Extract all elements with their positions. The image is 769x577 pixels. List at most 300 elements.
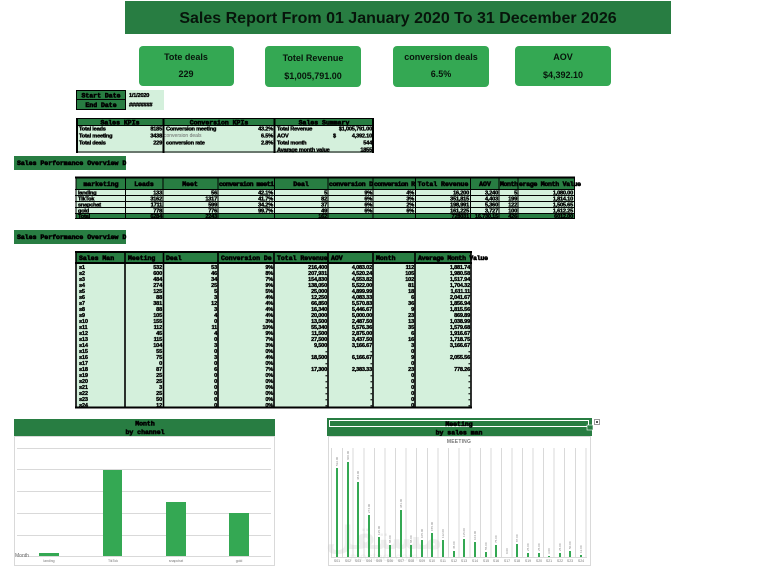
KPI summary table: conversion deals [164,133,202,139]
meeting column: 274 [153,283,163,289]
KPI summary table: Conversion KPIs [190,120,248,126]
sales man names [79,265,89,409]
KPI summary table: AOV [277,134,289,140]
marketing channel table: 3% [406,196,414,202]
revenue column: 20,000 [311,313,327,319]
revenue column: 16,340 [311,307,327,313]
KPI summary table: 1855 [360,148,372,154]
revenue column: 25,000 [311,289,327,295]
conversion column: 9% [265,331,273,337]
AOV column: 4,083.33 [352,295,372,301]
revenue column: 17,300 [311,367,327,373]
month column: 9 [411,355,414,361]
marketing channel table: 6% [406,208,414,214]
meeting column: 532 [153,265,162,271]
KPI card: Tote deals: Tote deals [164,52,208,62]
marketing channel table: 1,505.65 [553,202,573,208]
meeting column: 104 [153,343,163,349]
meeting data labels: 25.00 [537,543,541,551]
month column: 102 [405,277,414,283]
sales man names: s21 [79,385,88,391]
revenue column: - [325,361,327,367]
marketing channel table: 1711 [151,202,162,208]
marketing channel table: 122 [508,202,517,208]
date filter block: Start Date [81,92,121,100]
sales man names: s20 [79,379,88,385]
meeting data labels: 104.00 [473,530,477,540]
KPI summary table: 8185 [150,126,162,132]
title banner: Sales Report From 01 January 2020 To 31 December 2026 [179,10,617,27]
conversion column: 4% [265,295,273,301]
KPI summary table: $ [333,134,337,140]
section heading: overview 1: Sales Performance Overview D [17,160,126,167]
average month value column: 1,916.67 [450,331,470,337]
sales man names: s7 [79,301,85,307]
conversion column: 3% [265,343,273,349]
marketing channel table: 2% [406,202,414,208]
marketing channel table: 16,200 [453,190,469,196]
AOV column: - [370,397,372,403]
month column: 23 [408,367,414,373]
meeting data labels: 115.00 [462,528,466,537]
revenue column: 18,500 [311,355,327,361]
sales man names: s18 [79,367,88,373]
month chart header: Month [135,420,155,428]
meeting axis labels: S11 [440,559,446,563]
average month value column: - [468,361,470,367]
deal column: 3 [214,343,217,349]
marketing channel table: Leads [134,181,154,188]
average month value column: 3,166.67 [450,343,470,349]
month column: 18 [408,289,414,295]
meeting axis labels: S04 [366,559,372,563]
deal column: 4 [214,313,218,319]
month column: 9 [411,307,414,313]
deal column: 3 [214,307,217,313]
marketing channel table: 34.2% [258,202,273,208]
meeting axis labels: S01 [334,559,340,563]
marketing channel table: landing [78,190,97,196]
KPI card: Tote deals: 229 [178,69,194,79]
deal column: 0 [214,391,217,397]
AOV column [352,265,373,409]
meeting data labels: 381.00 [399,498,403,508]
average month value column: - [468,391,470,397]
month column: 0 [411,403,414,409]
marketing channel table: 351,815 [450,196,469,202]
meeting column: 600 [153,271,162,277]
marketing channel table: Total Revenue [418,181,468,188]
AOV column: 3,437.50 [352,337,372,343]
average month value column: - [468,349,470,355]
deal column: 0 [214,337,217,343]
bar chart: month by channel: TikTok [108,559,118,563]
KPI summary table: Total leads [79,126,106,132]
AOV column: 5,000.00 [352,313,372,319]
KPI card: Total Revenue: $1,005,791.00 [284,71,342,81]
KPI summary table: Total deals [79,140,106,146]
meeting data labels [335,450,583,554]
sales man table: Conversion De [221,255,272,262]
month column: 36 [408,301,414,307]
KPI summary table: 43.2% [258,126,273,132]
deal column: 0 [214,319,217,325]
meeting data labels: 88.00 [409,535,413,543]
AOV column: 5,522.00 [352,283,372,289]
meeting data labels: 45.00 [452,541,456,549]
meeting column: 25 [156,373,162,379]
meeting chart header: Meeting [445,421,473,428]
marketing channel table: 6% [364,202,372,208]
average month value column: - [468,373,470,379]
marketing channel table: 3162 [150,196,162,202]
marketing channel table: conversion D [329,181,373,188]
meeting axis labels: S19 [525,559,531,563]
month column: 0 [411,373,414,379]
meeting axis labels: S02 [345,559,351,563]
meeting column: 45 [156,331,162,337]
month column: 0 [411,397,414,403]
AOV column: 2,875.00 [352,331,372,337]
KPI summary table: 2.8% [261,140,273,146]
meeting axis labels: S13 [461,559,467,563]
revenue column: 138,050 [308,283,327,289]
month chart header [14,419,275,436]
KPI summary table: Sales Summary [299,120,349,126]
meeting data labels: 0.00 [505,548,509,554]
bar chart: month by channel: landing [43,559,55,563]
deal column: 46 [211,271,217,277]
sales man table: Month [376,255,396,262]
sales man names: s8 [79,307,85,313]
sales man names: s9 [79,313,85,319]
marketing channel table: 776 [208,208,217,214]
AOV column: 4,553.82 [352,277,372,283]
average month value column: 2,055.56 [450,355,470,361]
marketing channel table: 9% [364,190,372,196]
average month value column: 1,718.75 [450,337,470,343]
average month value column: 1,038.99 [450,319,470,325]
revenue column: 207,931 [308,271,327,277]
conversion column: 4% [265,307,273,313]
sales man names: s5 [79,289,85,295]
meeting axis labels: S06 [387,559,393,563]
meeting column [153,265,163,409]
marketing channel table: 49 [321,208,327,214]
KPI summary table: Avarage month value [277,148,330,154]
meeting column: 88 [156,307,162,313]
meeting column: 115 [154,337,162,343]
sales man table: Average Month Value [418,255,488,262]
meeting column: 50 [156,397,162,403]
revenue column: - [325,373,327,379]
marketing channel table: 599 [208,202,217,208]
meeting data labels: 87.00 [515,534,519,542]
month column: 81 [408,283,414,289]
AOV column: 6,166.67 [352,355,372,361]
AOV column: - [370,403,372,409]
sales man names: s11 [79,325,88,331]
conversion column: 5% [265,289,273,295]
conversion column: 0% [265,385,273,391]
AOV column: 4,520.24 [352,271,373,277]
sales man names: s12 [79,331,88,337]
deal column: 3 [214,355,217,361]
meeting data labels: 25.00 [558,543,562,551]
deal column: 0 [214,349,217,355]
deal column: 6 [214,367,217,373]
meeting column: 12 [156,403,162,409]
sales man table [75,251,488,409]
revenue column: - [325,379,327,385]
sales man table: Meeting [128,255,155,262]
conversion column: 10% [262,325,273,331]
section heading: overview 2 [14,230,126,244]
month column: 13 [408,319,414,325]
conversion column: 7% [265,277,273,283]
meeting axis labels: S20 [536,559,542,563]
deal column: 0 [214,361,217,367]
marketing channel table: 778 [153,208,162,214]
marketing channel table: TikTok [78,196,95,202]
marketing channel table: 5 [514,190,517,196]
month column: 0 [411,361,414,367]
average month value column: - [468,385,470,391]
marketing channel table: 6% [364,196,372,202]
bar chart: meeting by sales man: MEETING [447,439,471,445]
revenue column: 216,400 [308,265,327,271]
average month value column: 2,041.67 [450,295,470,301]
meeting column: 112 [154,325,162,331]
marketing channel table: snapchat [78,202,101,208]
meeting column: 155 [153,319,162,325]
selection handle icon [594,420,600,424]
meeting column: 88 [156,295,162,301]
meeting axis labels: S05 [376,559,382,563]
meeting column: 105 [153,313,162,319]
marketing channel table: 162 [318,214,327,220]
revenue column: 13,500 [311,319,327,325]
sales man names: s14 [79,343,89,349]
average month value column: 1,704.32 [450,283,470,289]
AOV column: 2,487.50 [352,319,372,325]
meeting data labels: 3.00 [547,548,551,554]
conversion column: 9% [265,265,273,271]
meeting data labels: 155.00 [430,521,434,531]
sales man names: s1 [79,265,85,271]
revenue column: - [325,403,327,409]
conversion column: 3% [265,319,273,325]
meeting axis labels: S18 [514,559,520,563]
marketing channel table: 41.7% [258,196,273,202]
meeting data labels: 600.00 [346,450,350,460]
meeting data labels: 25.00 [526,543,530,551]
AOV column: - [370,379,372,385]
average month value column: 1,856.94 [450,301,471,307]
revenue column: 9,500 [314,343,327,349]
deal column: 0 [214,379,217,385]
month column: 0 [411,385,414,391]
conversion column: 4% [265,313,273,319]
marketing channel table: 100 [508,208,517,214]
conversion column [262,265,273,409]
meeting data labels: 75.00 [494,535,498,543]
meeting column: 55 [156,349,162,355]
conversion column: 7% [265,367,273,373]
meeting column: 381 [153,301,162,307]
conversion column: 0% [265,391,273,397]
KPI card: AOV: $4,392.10 [543,70,583,80]
KPI summary table [76,118,374,154]
bar chart: month by channel: gold [236,559,242,563]
marketing channel table: 1,612.25 [553,208,573,214]
revenue column: - [325,349,327,355]
KPI card: conversion deals [393,46,489,87]
average month value column: 778.26 [454,367,470,373]
marketing channel table: 1,814.10 [553,196,573,202]
month column: 35 [408,325,414,331]
meeting data labels: 112.00 [441,529,445,538]
revenue column: - [325,397,327,403]
month column: 16 [408,337,414,343]
meeting bars [336,462,582,557]
revenue column: 27,500 [311,337,327,343]
meeting axis labels: S22 [557,559,563,563]
KPI summary table: conversion rate [166,140,205,146]
meeting axis labels: S09 [419,559,425,563]
conversion column: 8% [265,271,273,277]
marketing channel table: erage Month Value [519,181,581,188]
KPI summary table: 229 [153,140,162,146]
month column: 105 [405,271,414,277]
revenue column: 154,830 [308,277,327,283]
marketing channel table: 1,080.00 [553,190,573,196]
meeting chart header: by sales man [436,430,483,436]
marketing channel table: 5 [324,190,327,196]
revenue column: 66,850 [311,301,327,307]
date filter block: ######## [129,102,153,108]
bar chart: meeting by sales man [325,436,590,566]
month column: 0 [411,391,414,397]
AOV column: 5,446.67 [352,307,372,313]
KPI card: AOV: AOV [553,52,573,62]
sales man names: s22 [79,391,88,397]
deal column [211,265,218,409]
marketing channel table: 56 [211,190,217,196]
marketing channel table: conversion meeti [219,181,274,188]
watermark: مستقل [325,519,443,557]
average month value column: - [468,379,470,385]
KPI summary table: Total month [277,140,307,146]
AOV column: - [370,373,372,379]
meeting data labels: 274.00 [367,503,371,513]
deal column: 11 [211,325,217,331]
sales man names: s4 [79,283,86,289]
average month value column: 1,611.11 [450,289,470,295]
KPI summary table: 3438 [150,134,162,140]
meeting axis labels: S12 [451,559,457,563]
deal column: 5 [214,289,217,295]
marketing channel table: Deal [293,181,309,188]
marketing channel table: Month [500,181,518,188]
KPI card: conversion deals: conversion deals [404,52,478,62]
average month value column: 869.89 [454,313,470,319]
AOV column: 4,899.99 [352,289,372,295]
deal column: 12 [211,301,217,307]
marketing channel table: 2243 [205,214,217,220]
average month value column: - [468,403,470,409]
marketing channel table: 1317 [205,196,217,202]
KPI card: conversion deals: 6.5% [431,69,451,79]
AOV column: 5,570.83 [352,301,372,307]
marketing channel table: 426 [508,214,517,220]
meeting axis labels: S08 [408,559,414,563]
bar chart: month by channel [14,436,274,566]
section heading: overview 2: Sales Performance Overview D [17,234,126,241]
deal column: 3 [214,295,217,301]
revenue column: - [325,385,327,391]
meeting column: 0 [159,361,162,367]
meeting axis labels: S07 [398,559,404,563]
meeting axis labels: S14 [472,559,478,563]
conversion column: 0% [265,403,273,409]
deal column: 53 [211,265,217,271]
marketing channel table: 161,225 [450,208,469,214]
meeting axis labels: S23 [567,559,573,563]
section heading: overview 1 [14,156,126,170]
KPI card: Tote deals [139,46,234,86]
sales man names: s17 [79,361,88,367]
marketing channel table: Meet [182,181,198,188]
sales man names: s16 [79,355,88,361]
deal column: 0 [214,403,217,409]
KPI card: AOV [515,46,611,86]
marketing channel table: 82 [321,196,327,202]
meeting column: 25 [156,379,162,385]
marketing channel table: 6% [364,208,372,214]
meeting axis labels [334,559,584,563]
meeting column: 25 [156,391,162,397]
sales man table: Deal [166,255,182,262]
revenue column: - [325,391,327,397]
AOV column: - [370,349,372,355]
conversion column: 0% [265,373,273,379]
month column: 0 [411,349,414,355]
meeting data labels: 532.00 [335,456,339,466]
sales man names: s3 [79,277,85,283]
month column: 6 [411,331,414,337]
average month value column: 1,815.56 [450,307,470,313]
meeting axis labels: S03 [355,559,361,563]
KPI summary table: Conversion meeting [166,126,217,132]
revenue column: 55,340 [311,325,327,331]
average month value column: 1,881.74 [450,265,471,271]
AOV column: - [370,361,372,367]
sales man names: s15 [79,349,88,355]
sales man names: s2 [79,271,85,277]
sales man names: s19 [79,373,88,379]
KPI summary table: 544 [363,140,373,146]
meeting data labels: 484.00 [356,470,360,480]
meeting column: 125 [153,289,162,295]
marketing channel table: 37 [321,202,327,208]
month column: 0 [411,379,414,385]
meeting data labels: 12.00 [579,545,583,553]
meeting data labels: 88.00 [388,535,392,543]
marketing channel table: 5,360 [485,202,498,208]
marketing channel table: gold [78,208,90,214]
marketing channel table: 16,730.15 [475,214,498,220]
